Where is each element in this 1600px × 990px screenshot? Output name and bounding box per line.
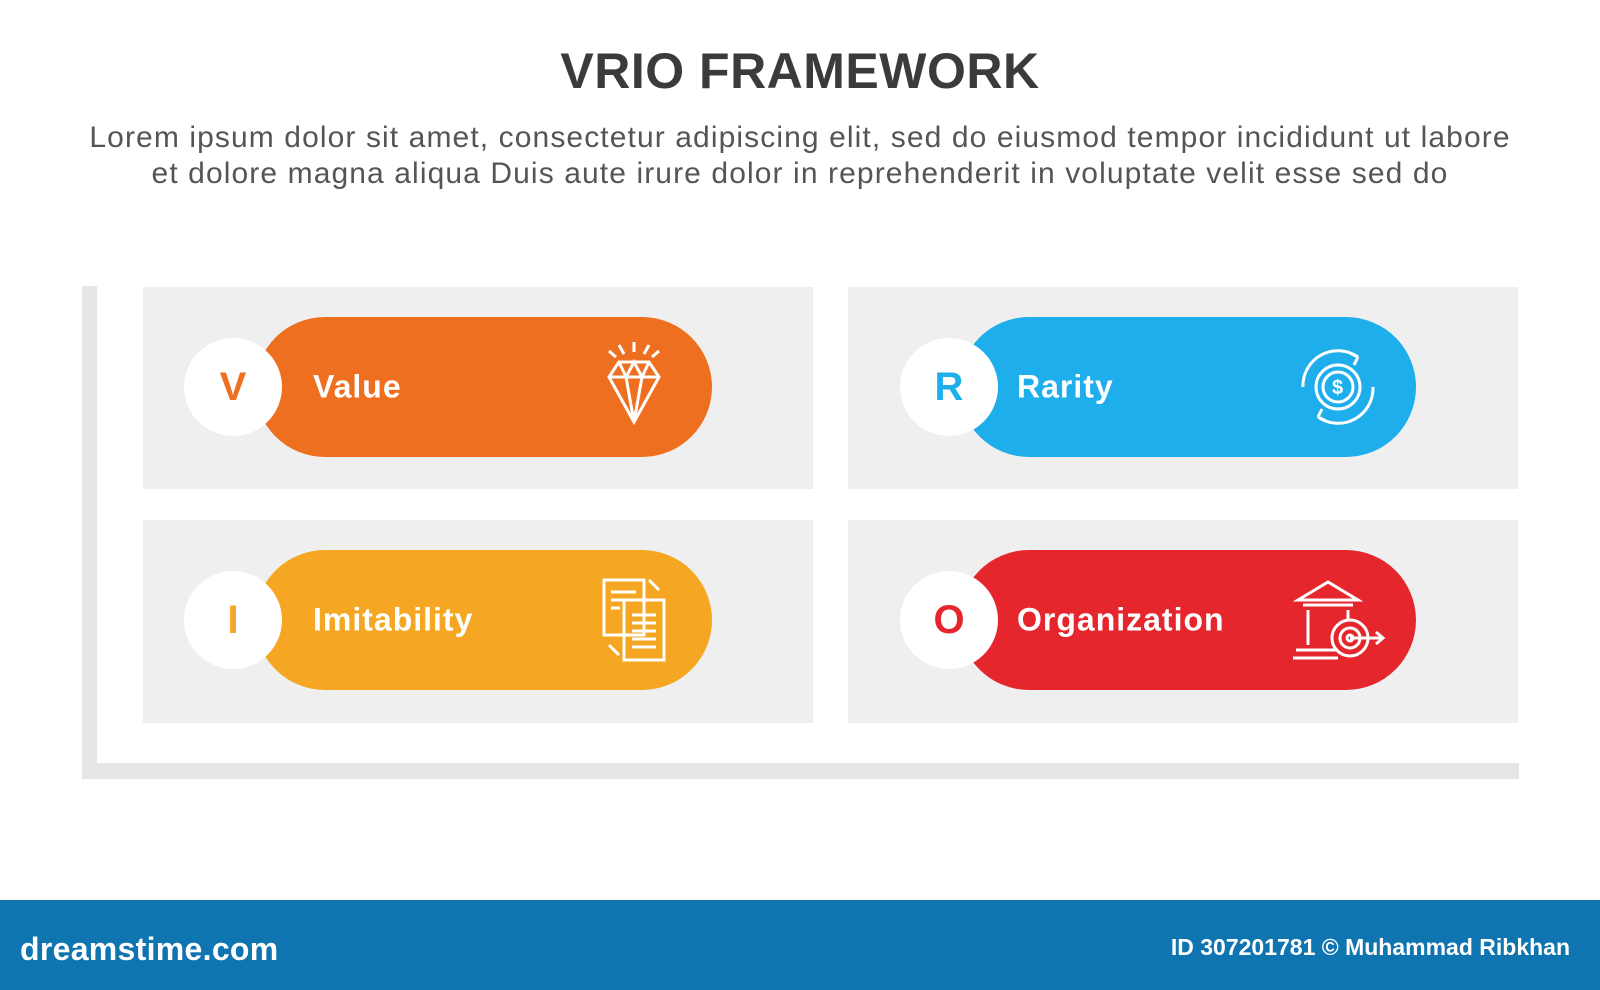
letter circle: V: V — [220, 365, 246, 409]
panel: imitability — [143, 520, 813, 723]
subtitle text — [89, 121, 1511, 190]
pill: organization — [959, 550, 1416, 690]
frame: L-shaped axis — [82, 286, 1519, 779]
subtitle text: et dolore magna aliqua Duis aute irure dolor in reprehenderit in voluptate velit esse sed do — [152, 157, 1448, 190]
panel: rarity — [848, 287, 1518, 489]
footer credit text: ID 307201781 © Muhammad Ribkhan — [1171, 934, 1570, 960]
icon: documents — [602, 578, 666, 662]
letter circle: O — [900, 571, 998, 669]
icon: coin cycle — [1301, 349, 1374, 425]
pill: rarity — [959, 317, 1416, 457]
pill: rarity: Rarity — [1017, 368, 1114, 404]
pill: imitability: Imitability — [313, 602, 473, 638]
pill: imitability — [255, 550, 712, 690]
letter circle: R — [900, 338, 998, 436]
letter circle: O: O — [933, 598, 965, 642]
icon: building target — [1292, 580, 1386, 660]
title: VRIO FRAMEWORK — [560, 43, 1040, 99]
icon: diamond — [607, 342, 661, 425]
panel: value — [143, 287, 813, 489]
subtitle text: Lorem ipsum dolor sit amet, consectetur adipiscing elit, sed do eiusmod tempor incididunt ut labore — [89, 121, 1511, 154]
letter circle: I — [184, 571, 282, 669]
icon: coin cycle: $ — [1332, 377, 1344, 399]
panel: organization — [848, 520, 1518, 723]
pill: value — [255, 317, 712, 457]
letter circle: I: I — [227, 598, 239, 642]
letter circle: V — [184, 338, 282, 436]
letter circle: R: R — [935, 365, 963, 409]
pill: value: Value — [313, 368, 402, 404]
footer bar — [0, 900, 1600, 990]
footer logo text: dreamstime.com — [20, 931, 279, 967]
pill: organization: Organization — [1017, 602, 1225, 638]
